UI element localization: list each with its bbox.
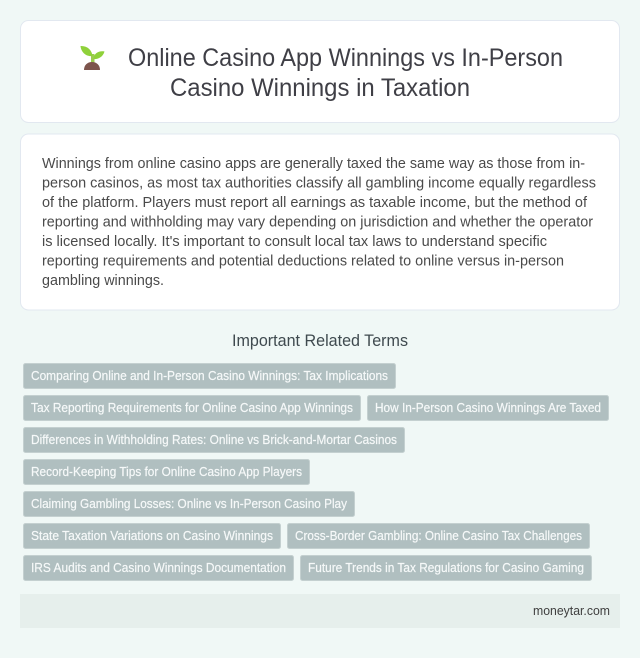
panel: title card — [20, 20, 620, 122]
chip: Cross-Border Gambling: Online Casino Tax Challenges — [295, 529, 582, 543]
chip — [300, 556, 592, 580]
chip — [24, 396, 360, 420]
title: Casino Winnings in Taxation — [170, 74, 470, 102]
chip — [368, 396, 608, 420]
related terms chips — [24, 364, 608, 580]
text block: summary paragraph: is licensed locally. It's important to consult local tax laws to understand specific — [42, 233, 547, 250]
text block: summary paragraph: reporting and withholding may vary depending on jurisdiction and whether the operator — [42, 214, 593, 230]
footer source: moneytar.com — [533, 603, 610, 618]
text block: summary paragraph: reporting requirements and potential deductions related to online versus in-person — [42, 252, 564, 270]
chip: Record-Keeping Tips for Online Casino App Players — [31, 465, 302, 479]
chip: How In-Person Casino Winnings Are Taxed — [375, 401, 601, 415]
icon: seedling — [80, 46, 104, 70]
chip: IRS Audits and Casino Winnings Documentation — [31, 561, 286, 575]
chip — [24, 524, 280, 548]
text block: summary paragraph: Winnings from online casino apps are generally taxed the same way as those from in- — [42, 155, 585, 172]
heading: related terms: Important Related Terms — [232, 332, 408, 350]
chip — [24, 460, 310, 484]
chip — [24, 364, 396, 388]
footer — [20, 594, 620, 628]
title: Online Casino App Winnings vs In-Person — [128, 44, 563, 72]
chip: Comparing Online and In-Person Casino Winnings: Tax Implications — [31, 369, 388, 383]
chip: Differences in Withholding Rates: Online vs Brick-and-Mortar Casinos — [31, 433, 397, 447]
chip: Claiming Gambling Losses: Online vs In-Person Casino Play — [31, 497, 348, 511]
text block: summary paragraph: of the platform. Players must report all earnings as taxable income, but the method of — [42, 194, 588, 211]
chip — [24, 492, 354, 516]
chip — [24, 556, 294, 580]
text block: summary paragraph: person casinos, as most tax authorities classify all gambling income equally regardless — [42, 174, 596, 192]
chip: Future Trends in Tax Regulations for Casino Gaming — [308, 561, 584, 575]
text block: summary paragraph — [42, 155, 596, 289]
panel: summary — [20, 134, 620, 310]
chip: Tax Reporting Requirements for Online Casino App Winnings — [31, 401, 353, 415]
title — [128, 44, 563, 102]
text block: summary paragraph: gambling winnings. — [42, 272, 164, 289]
chip: State Taxation Variations on Casino Winnings — [31, 529, 273, 543]
chip — [288, 524, 590, 548]
chip — [24, 428, 404, 452]
